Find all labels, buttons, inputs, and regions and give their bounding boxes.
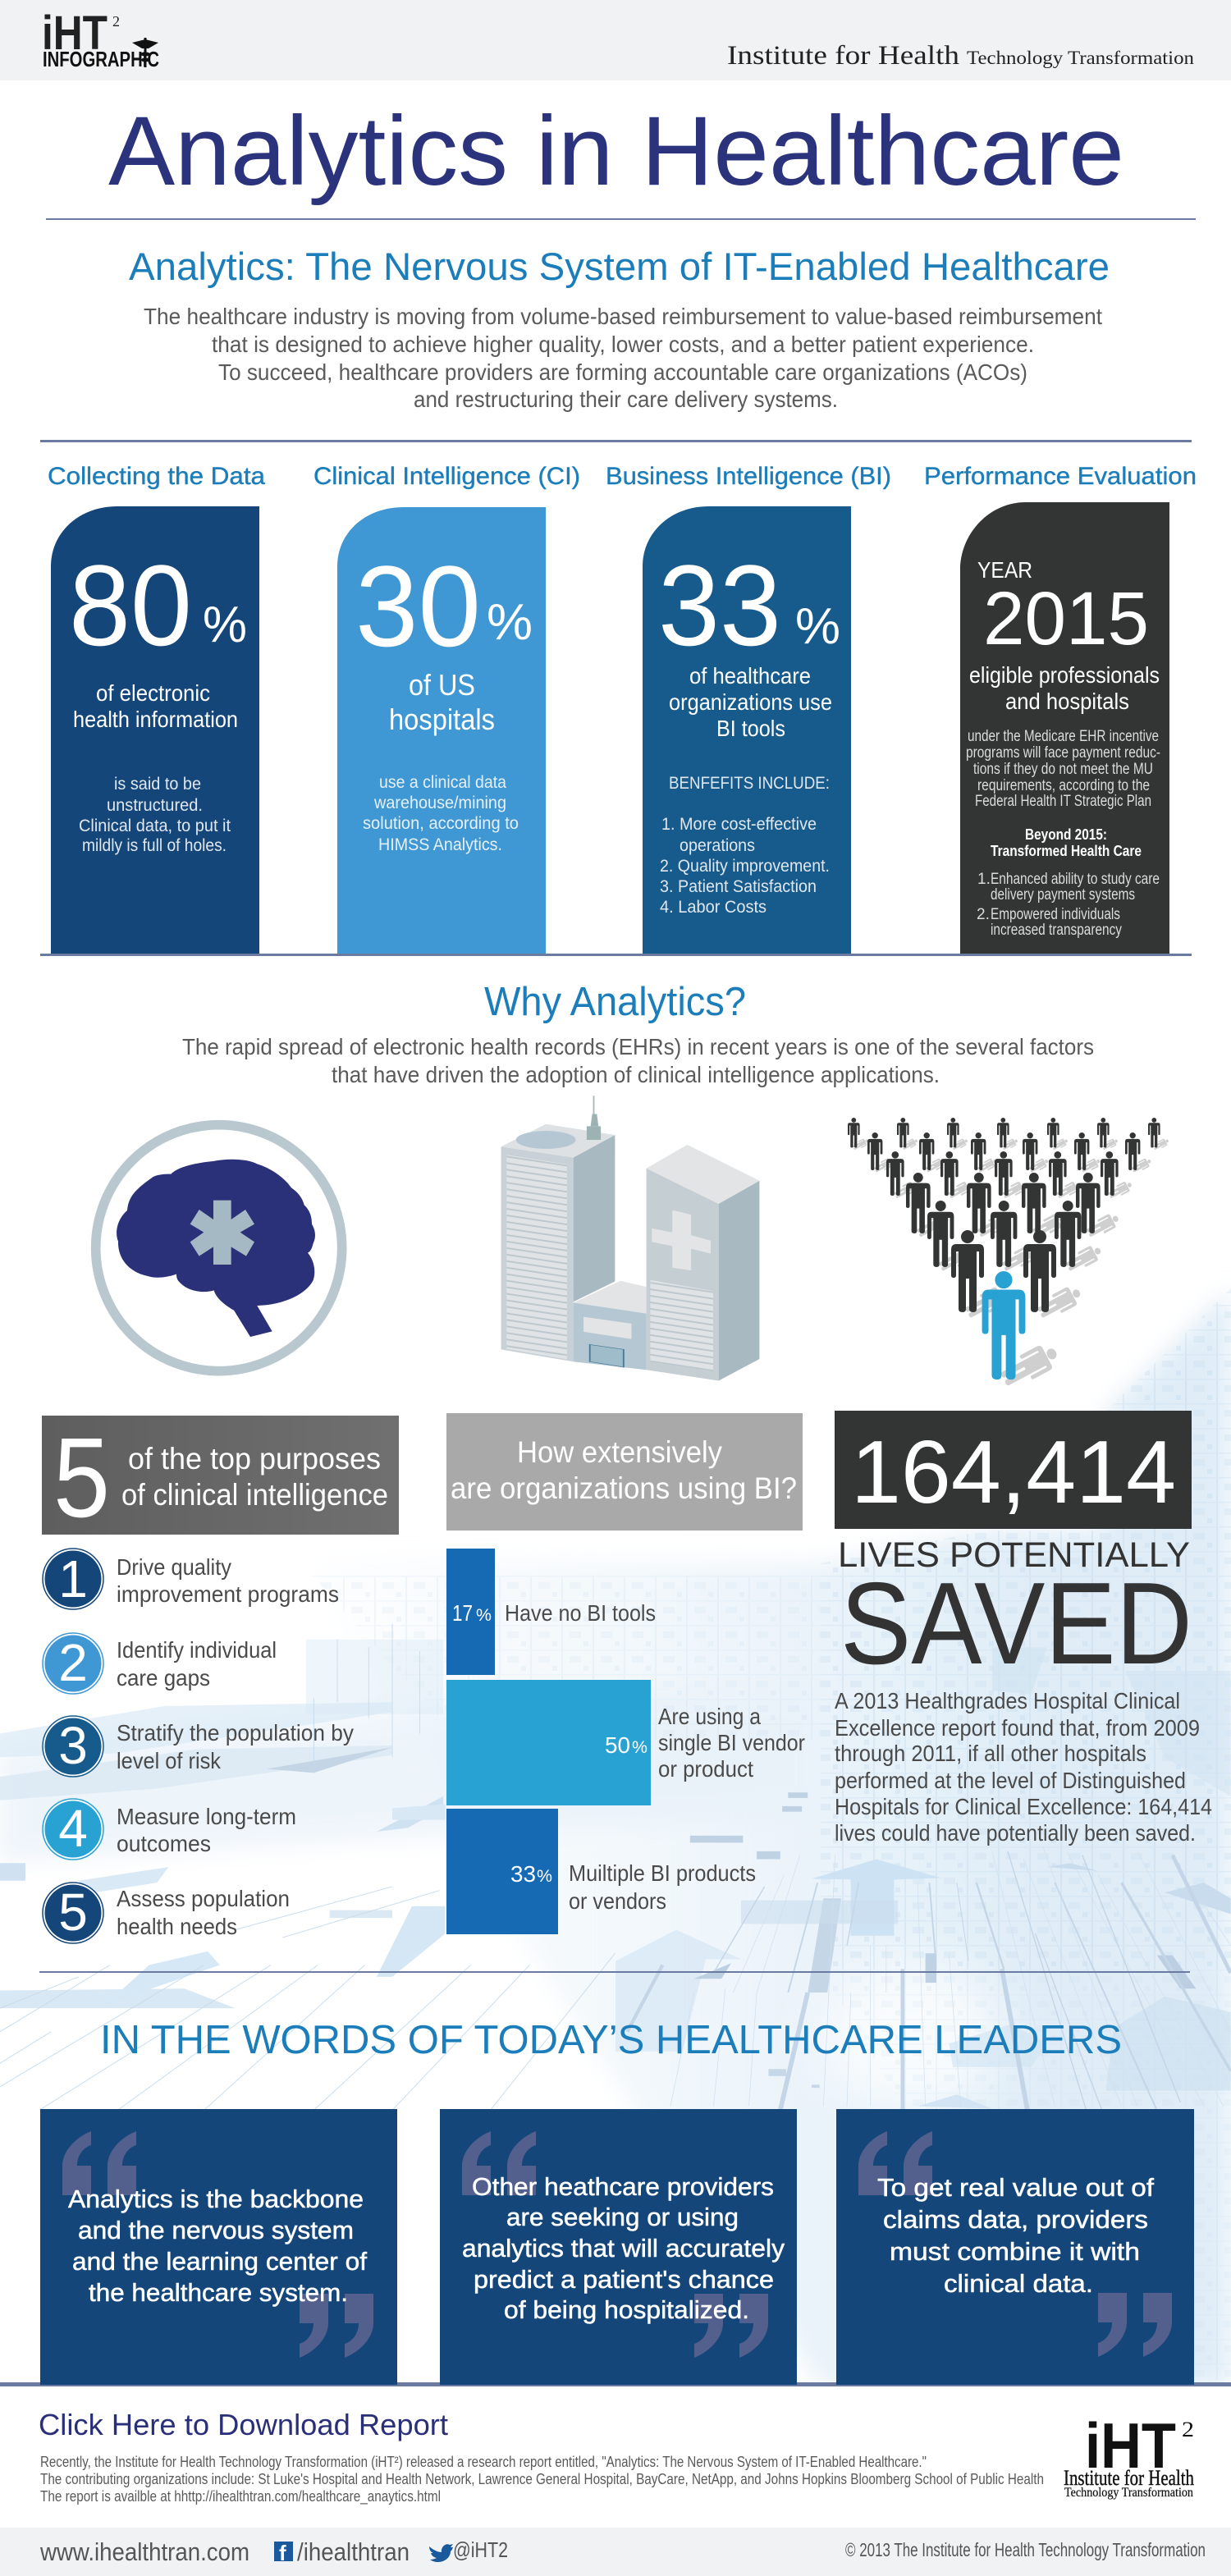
heading: why analytics: Why Analytics?: [484, 980, 746, 1024]
list: benefits: 2. Quality improvement.: [660, 857, 830, 876]
report description: Recently, the Institute for Health Technology Transformation (iHT²) released a research report entitled, "Analytics: The Nervous System of IT-Enabled Healthcare.": [40, 2454, 927, 2470]
list: transformed health care: Empowered individuals: [991, 906, 1120, 923]
heading box: 5: [53, 1415, 110, 1541]
heading: healthcare leaders: IN THE WORDS OF TODAY’S HEALTHCARE LEADERS: [100, 2018, 1122, 2062]
stat: 33%: %: [795, 598, 840, 655]
quote text: Analytics is the backbone: [68, 2185, 364, 2213]
panel: clinical intelligence, 30%: [337, 507, 546, 954]
item 1: improvement programs: [117, 1581, 339, 1607]
list: benefits: 3. Patient Satisfaction: [660, 877, 817, 896]
quote text: [462, 2172, 785, 2324]
list: benefits: 1. More cost-effective: [661, 815, 817, 834]
logo: institute for health: Technology Transformation: [1064, 2486, 1193, 2500]
heading box: of the top purposes: [128, 1442, 381, 1476]
icon: facebook: f: [279, 2541, 286, 2565]
subtitle: Analytics: The Nervous System of IT-Enabled Healthcare: [129, 245, 1110, 288]
icon: twitter bird: [429, 2544, 453, 2562]
icon: hospital building: [501, 1096, 759, 1381]
report description: [40, 2454, 1044, 2505]
quote text: analytics that will accurately: [462, 2234, 785, 2263]
icon: quotation marks: [858, 2131, 1172, 2357]
quote text: clinical data.: [944, 2269, 1093, 2298]
logo: iHT2 infographic: 2: [112, 13, 120, 30]
text: unstructured note: unstructured.: [107, 796, 203, 815]
item 3: [43, 1716, 354, 1777]
stat: year 2015: 2015: [983, 577, 1149, 661]
column headings: Collecting the Data: [48, 463, 265, 490]
text: medicare note: Federal Health IT Strategic Plan: [975, 793, 1151, 810]
website: www.ihealthtran.com: [39, 2537, 249, 2566]
item 5: 5: [58, 1883, 88, 1942]
header bar: [0, 0, 1231, 80]
panel: lives saved: [835, 1411, 1212, 1846]
intro text: that is designed to achieve higher quality, lower costs, and a better patient experience.: [212, 332, 1034, 357]
list: benefits: BENFEFITS INCLUDE:: [669, 774, 830, 793]
bar: 50% single vendor: or product: [658, 1756, 753, 1782]
panel: collecting the data, 80%: [51, 506, 259, 954]
quote text: and the nervous system: [78, 2216, 354, 2244]
text: healthgrades finding: through 2011, if all other hospitals: [835, 1741, 1146, 1766]
logo: institute for health: Institute for Health: [1064, 2466, 1194, 2490]
item 1: [43, 1549, 339, 1609]
item 1: Drive quality: [117, 1554, 231, 1580]
text: data warehouse note: warehouse/mining: [373, 794, 506, 812]
quote text: [877, 2173, 1154, 2298]
text: unstructured note: mildly is full of holes.: [82, 836, 227, 855]
icon: crowd of people with one highlighted: [848, 1118, 1170, 1392]
text: organizations use BI tools: BI tools: [716, 716, 785, 741]
text: organizations use BI tools: [669, 663, 832, 741]
bar: 17% no BI tools: [446, 1549, 656, 1675]
column headings: [48, 463, 1197, 490]
intro text: [144, 304, 1102, 412]
column headings: Performance Evaluation: [924, 463, 1197, 490]
heading box: [446, 1413, 803, 1531]
text: data warehouse note: HIMSS Analytics.: [378, 835, 502, 854]
text: eligible professionals: and hospitals: [1005, 689, 1129, 714]
quote text: are seeking or using: [506, 2203, 739, 2231]
logo: iHT2 infographic: [42, 7, 159, 71]
icon: brain with star of life: [96, 1125, 342, 1371]
quote text: claims data, providers: [883, 2205, 1148, 2234]
organisation name: Institute for Health: [727, 41, 960, 71]
quote text: predict a patient's chance: [474, 2265, 774, 2294]
item 2: Identify individual: [117, 1637, 277, 1663]
text: why analytics intro: The rapid spread of electronic health records (EHRs) in recent years is one of the several factors: [182, 1034, 1094, 1059]
text: unstructured note: Clinical data, to put it: [79, 817, 231, 835]
list: transformed health care: increased transparency: [991, 922, 1122, 939]
report description: The report is availble at hhttp://ihealthtran.com/healthcare_anaytics.html: [40, 2488, 441, 2505]
column headings: Business Intelligence (BI): [606, 463, 891, 490]
column headings: Clinical Intelligence (CI): [313, 463, 580, 490]
item 4: 4: [58, 1799, 88, 1858]
panel: BI usage chart: [446, 1413, 805, 1934]
item 5: health needs: [117, 1914, 237, 1939]
item 4: [43, 1799, 296, 1860]
item 3: Stratify the population by: [117, 1720, 354, 1746]
logo: iHT2 infographic: iHT: [42, 7, 108, 60]
item 3: 3: [58, 1716, 88, 1775]
item 2: [43, 1633, 277, 1694]
text: organizations use BI tools: of healthcare: [689, 663, 811, 689]
item 2: care gaps: [117, 1665, 210, 1691]
logo: iHT2 infographic: INFOGRAPHIC: [43, 47, 159, 71]
twitter handle: @iHT2: [453, 2537, 508, 2562]
logo: institute for health: iHT: [1085, 2409, 1176, 2482]
list: benefits: 4. Labor Costs: [660, 898, 767, 917]
bar: 33% multiple products: [446, 1809, 756, 1934]
list: transformed health care: Enhanced ability to study care: [991, 871, 1160, 888]
text: electronic health information: of electronic: [96, 680, 210, 706]
text: eligible professionals: [969, 662, 1160, 714]
stat: 80%: 80: [69, 541, 192, 670]
bar: 33% multiple products: Muiltiple BI products: [569, 1860, 756, 1886]
panel: five top purposes: [42, 1415, 399, 1943]
bar: 33% multiple products: 33: [510, 1861, 536, 1887]
bar: 17% no BI tools: %: [476, 1606, 492, 1625]
item 4: outcomes: [117, 1831, 211, 1856]
stat: 30%: 30: [355, 542, 481, 670]
list: transformed health care: delivery payment systems: [991, 886, 1135, 904]
list: benefits: [660, 774, 830, 917]
stat: 80%: %: [203, 597, 247, 653]
panel: performance evaluation, year 2015: [960, 502, 1169, 954]
text: eligible professionals: eligible professionals: [969, 662, 1160, 688]
text: medicare note: [966, 728, 1160, 810]
item 3: level of risk: [117, 1748, 222, 1773]
organisation name: Technology Transformation: [967, 48, 1195, 68]
text: medicare note: programs will face payment reduc-: [966, 744, 1160, 762]
stat: year 2015: YEAR: [977, 557, 1032, 583]
text: organizations use BI tools: organizations use: [669, 689, 832, 715]
bar: 50% single vendor: %: [632, 1738, 648, 1757]
icon: quotation marks: [62, 2131, 373, 2358]
quote panel 2: [440, 2109, 797, 2385]
item 1: 1: [58, 1549, 88, 1608]
quote text: Other heathcare providers: [472, 2172, 774, 2201]
text: beyond 2015: Beyond 2015:: [1025, 826, 1107, 843]
list: transformed health care: 2.: [977, 906, 990, 923]
text: healthgrades finding: [835, 1688, 1212, 1846]
bar: 33% multiple products: or vendors: [569, 1888, 666, 1914]
text: medicare note: tions if they do not meet the MU: [973, 761, 1153, 778]
text: healthgrades finding: Excellence report found that, from 2009: [835, 1715, 1200, 1741]
download link: Click Here to Download Report: [39, 2408, 448, 2441]
organisation name: [727, 41, 1195, 71]
item 5: Assess population: [117, 1886, 290, 1911]
text: medicare note: requirements, according to the: [977, 777, 1150, 794]
text: beyond 2015: Transformed Health Care: [991, 843, 1142, 859]
heading box: [42, 1415, 399, 1541]
text: electronic health information: health information: [73, 707, 238, 732]
heading box: are organizations using BI?: [451, 1471, 797, 1505]
bar: 50% single vendor: 50: [605, 1732, 630, 1758]
text: healthgrades finding: lives could have potentially been saved.: [835, 1820, 1196, 1846]
bar: 50% single vendor: Are using a: [658, 1704, 761, 1729]
title: Analytics in Healthcare: [108, 96, 1124, 206]
icon: quotation marks: [462, 2131, 768, 2358]
quote panel 3: [836, 2109, 1194, 2385]
text: medicare note: under the Medicare EHR incentive: [968, 728, 1159, 745]
background: abstract data arrows: [0, 1288, 1231, 2388]
stat: 164,414: 164,414: [851, 1422, 1176, 1522]
report description: The contributing organizations include: St Luke's Hospital and Health Network, Lawrence General Hospital, BayCare, NetApp, and Johns Hopkins Bloomberg School of Public Health: [40, 2471, 1044, 2487]
quote text: To get real value out of: [877, 2173, 1154, 2202]
bar: 33% multiple products: %: [537, 1867, 552, 1886]
text: lives potentially: LIVES POTENTIALLY: [838, 1535, 1190, 1575]
panel: business intelligence, 33%: [643, 506, 851, 954]
quote text: [68, 2185, 367, 2307]
item 4: Measure long-term: [117, 1804, 296, 1829]
footer bar: [0, 2528, 1231, 2576]
icon: caduceus: [132, 38, 158, 67]
text: data warehouse note: solution, according to: [363, 814, 519, 833]
text: unstructured note: [79, 775, 231, 855]
item 5: [43, 1883, 290, 1943]
text: why analytics intro: that have driven the adoption of clinical intelligence applications.: [332, 1062, 940, 1087]
heading box: How extensively: [517, 1435, 722, 1469]
intro text: The healthcare industry is moving from volume-based reimbursement to value-based reimbursement: [144, 304, 1102, 329]
text: data warehouse note: [363, 773, 519, 854]
text: saved: SAVED: [840, 1558, 1192, 1689]
logo: institute for health: 2: [1182, 2418, 1194, 2441]
text: electronic health information: [73, 680, 238, 732]
text: unstructured note: is said to be: [114, 775, 201, 794]
text: data warehouse note: use a clinical data: [379, 773, 506, 792]
quote text: of being hospitalized.: [504, 2295, 749, 2324]
list: transformed health care: 1.: [977, 871, 991, 888]
text: beyond 2015: [991, 826, 1142, 859]
text: of US hospitals: of US: [409, 668, 475, 702]
icon: facebook: [274, 2541, 293, 2565]
intro text: To succeed, healthcare providers are forming accountable care organizations (ACOs): [218, 359, 1027, 385]
text: healthgrades finding: A 2013 Healthgrades Hospital Clinical: [835, 1688, 1180, 1714]
text: healthgrades finding: performed at the level of Distinguished: [835, 1768, 1186, 1793]
text: of US hospitals: hospitals: [389, 702, 495, 736]
facebook handle: /ihealthtran: [297, 2537, 410, 2566]
quote panel 1: [40, 2109, 397, 2385]
quote text: and the learning center of: [72, 2247, 367, 2276]
stat: 33%: 33: [658, 541, 781, 670]
bar: 50% single vendor: [446, 1680, 805, 1805]
quote text: must combine it with: [890, 2237, 1140, 2266]
heading box: of clinical intelligence: [121, 1478, 388, 1512]
quote text: the healthcare system.: [89, 2278, 348, 2307]
list: transformed health care: [977, 871, 1160, 939]
intro text: and restructuring their care delivery systems.: [414, 387, 838, 412]
logo: institute for health: [1064, 2409, 1194, 2500]
bar: 50% single vendor: single BI vendor: [658, 1730, 805, 1755]
white footer area: [0, 2386, 1231, 2528]
text: of US hospitals: [389, 668, 495, 736]
bar: 17% no BI tools: 17: [452, 1600, 473, 1626]
text: why analytics intro: [182, 1034, 1094, 1087]
list: benefits: operations: [680, 836, 755, 855]
item 2: 2: [58, 1633, 88, 1692]
stat: 30%: %: [487, 594, 533, 651]
bar: 17% no BI tools: Have no BI tools: [505, 1600, 656, 1626]
